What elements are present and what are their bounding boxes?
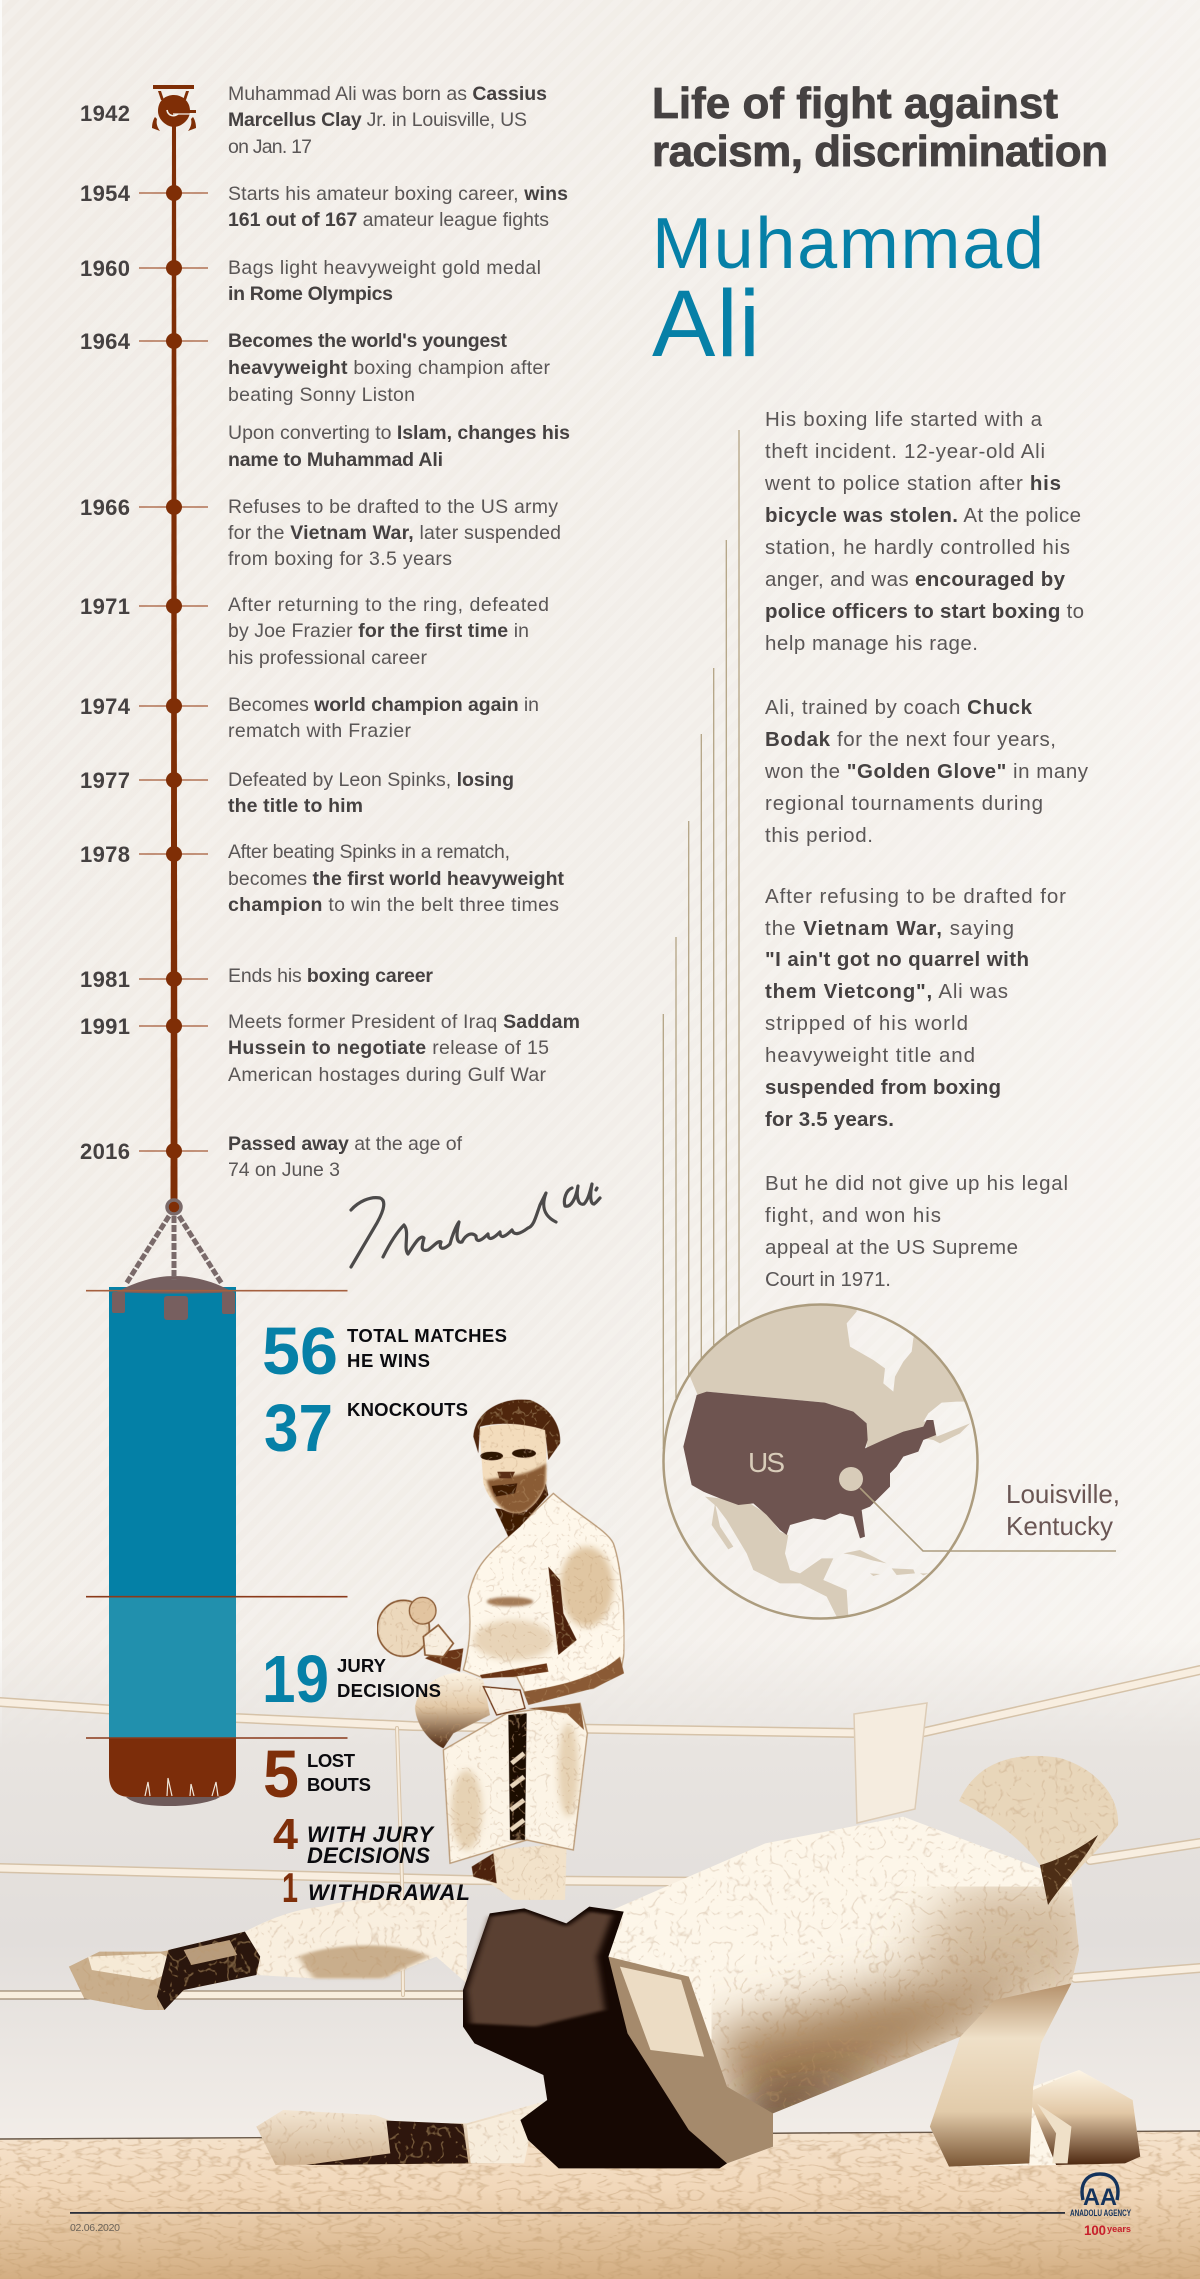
- footer rule and date: 02.06.2020: [70, 2222, 120, 2234]
- timeline events text: Upon converting to Islam, changes his: [228, 422, 570, 444]
- opponent floor leg: [256, 2102, 543, 2165]
- biography text: theft incident. 12-year-old Ali: [765, 440, 1045, 463]
- biography guide lines: [663, 430, 739, 1449]
- timeline events text: Hussein to negotiate release of 15: [228, 1037, 549, 1059]
- biography text: station, he hardly controlled his: [765, 536, 1070, 559]
- stat: 1 withdrawal: [282, 1864, 470, 1911]
- stat: 5 lost bouts: 5: [263, 1737, 299, 1812]
- ring backdrop wall: [0, 1640, 1200, 2140]
- stat: 4 with jury decisions: [273, 1810, 435, 1868]
- title: Muhammad Ali: Muhammad: [652, 204, 1044, 284]
- timeline events text: [228, 83, 580, 1181]
- heading: Life of fight against: [652, 79, 1058, 128]
- timeline years: 1977: [80, 768, 130, 793]
- land: Canada: [690, 1306, 970, 1448]
- timeline events text: on Jan. 17: [228, 136, 312, 158]
- timeline events text: Marcellus Clay Jr. in Louisville, US: [228, 109, 527, 131]
- timeline events text: Ends his boxing career: [228, 965, 433, 987]
- biography text: this period.: [765, 824, 873, 847]
- timeline years: 1981: [80, 967, 130, 992]
- opponent raised boot: [69, 1947, 191, 2010]
- timeline events text: Bags light heavyweight gold medal: [228, 257, 541, 279]
- timeline events text: his professional career: [228, 647, 428, 669]
- timeline events text: Refuses to be drafted to the US army: [228, 496, 558, 518]
- stat: 56 total wins: 56: [262, 1314, 338, 1389]
- stat: 4 with jury decisions: WITH JURY: [307, 1822, 435, 1847]
- floor edge: [0, 2131, 1200, 2139]
- biography text: stripped of his world: [765, 1012, 968, 1035]
- icon: speed bag: [152, 85, 196, 131]
- stat: 4 with jury decisions: DECISIONS: [307, 1843, 430, 1868]
- timeline nodes: [166, 185, 182, 1159]
- biography text: suspended from boxing: [765, 1076, 1001, 1099]
- biography text: fight, and won his: [765, 1204, 941, 1227]
- biography text: bicycle was stolen. At the police: [765, 504, 1081, 527]
- biography text: heavyweight title and: [765, 1044, 975, 1067]
- timeline events text: from boxing for 3.5 years: [228, 548, 452, 570]
- biography text: Court in 1971.: [765, 1268, 891, 1291]
- biography text: the Vietnam War, saying: [765, 917, 1014, 940]
- timeline events text: 74 on June 3: [228, 1159, 340, 1181]
- biography text: won the "Golden Glove" in many: [764, 760, 1089, 783]
- timeline events text: in Rome Olympics: [228, 283, 393, 305]
- timeline years: 2016: [80, 1139, 130, 1164]
- stat: 19 jury decisions: JURY: [337, 1655, 387, 1676]
- timeline events text: Defeated by Leon Spinks, losing: [228, 769, 514, 791]
- bag section: jury decisions: [109, 1597, 236, 1738]
- timeline years: 1964: [80, 329, 131, 354]
- timeline ticks: [139, 193, 208, 1151]
- photo: opponent on the canvas: [69, 1817, 1140, 2167]
- ring ropes and corner post: [0, 1670, 1200, 1995]
- logo: Anadolu Agency: [1070, 2174, 1131, 2238]
- bag top cap: [117, 1276, 233, 1294]
- biography text: After refusing to be drafted for: [765, 885, 1066, 908]
- timeline events text: After beating Spinks in a rematch,: [228, 841, 510, 863]
- stat: 37 knockouts: [264, 1391, 468, 1466]
- title: Muhammad Ali: [652, 204, 1044, 377]
- logo: Anadolu Agency: ANADOLU AGENCY: [1070, 2208, 1131, 2218]
- timeline events text: Becomes world champion again in: [228, 694, 539, 716]
- timeline years: 1954: [80, 181, 131, 206]
- opponent head: [959, 1756, 1118, 1905]
- stat: 37 knockouts: KNOCKOUTS: [347, 1399, 468, 1420]
- timeline events text: beating Sonny Liston: [228, 384, 415, 406]
- stat: 5 lost bouts: LOST: [307, 1750, 356, 1771]
- bag buckles: [112, 1292, 235, 1320]
- US label: US: [748, 1447, 785, 1478]
- globe outline: [664, 1304, 978, 1618]
- timeline years: 1971: [80, 594, 130, 619]
- stat: 4 with jury decisions: 4: [273, 1810, 299, 1859]
- opponent raised leg: [245, 1897, 467, 1983]
- timeline years: 1978: [80, 842, 130, 867]
- bag chains: [126, 1216, 222, 1284]
- timeline years: 1942: [80, 101, 130, 126]
- logo: Anadolu Agency: 100: [1084, 2222, 1106, 2238]
- stat: 19 jury decisions: DECISIONS: [337, 1680, 441, 1701]
- timeline events text: name to Muhammad Ali: [228, 449, 443, 471]
- callout: Louisville, Kentucky: Louisville,: [1006, 1479, 1120, 1509]
- biography text: went to police station after his: [764, 472, 1061, 495]
- photo: Ali standing: [377, 1399, 624, 1900]
- Louisville marker: [839, 1467, 863, 1491]
- timeline events text: Meets former President of Iraq Saddam: [228, 1011, 580, 1033]
- bag level lines: [86, 1291, 348, 1738]
- stat: 5 lost bouts: [263, 1737, 371, 1812]
- opponent body shading: [712, 1887, 1094, 2167]
- bag bottom cap: [126, 1797, 220, 1806]
- stat: 56 total wins: TOTAL MATCHES: [347, 1325, 507, 1346]
- timeline events text: heavyweight boxing champion after: [228, 357, 550, 379]
- biography text: But he did not give up his legal: [765, 1172, 1068, 1195]
- callout: Louisville, Kentucky: Kentucky: [1006, 1511, 1113, 1541]
- signature: [351, 1184, 600, 1267]
- biography text: "I ain't got no quarrel with: [765, 948, 1029, 971]
- heading: [652, 79, 1108, 176]
- stat: 5 lost bouts: BOUTS: [307, 1774, 371, 1795]
- biography text: Ali, trained by coach Chuck: [765, 696, 1033, 719]
- timeline events text: 161 out of 167 amateur league fights: [228, 209, 549, 231]
- heading: racism, discrimination: [652, 127, 1108, 176]
- timeline events text: champion to win the belt three times: [228, 894, 559, 916]
- biography text: His boxing life started with a: [765, 408, 1043, 431]
- timeline events text: American hostages during Gulf War: [228, 1064, 546, 1086]
- bag ring: [167, 1200, 181, 1214]
- callout: Louisville, Kentucky: [860, 1479, 1120, 1551]
- biography text: [764, 408, 1089, 1291]
- ring floor: [0, 2131, 1200, 2279]
- biography text: help manage his rage.: [765, 632, 978, 655]
- stat: 37 knockouts: 37: [264, 1391, 333, 1466]
- timeline events text: Muhammad Ali was born as Cassius: [228, 83, 547, 105]
- timeline events text: rematch with Frazier: [228, 720, 412, 742]
- biography text: them Vietcong", Ali was: [765, 980, 1008, 1003]
- timeline events text: Passed away at the age of: [228, 1133, 463, 1155]
- stat: 19 jury decisions: [262, 1642, 441, 1717]
- land: Mexico and Central America: [705, 1497, 928, 1617]
- left edge strip: [0, 0, 2, 2279]
- biography text: police officers to start boxing to: [765, 600, 1084, 623]
- stat: 1 withdrawal: WITHDRAWAL: [308, 1880, 470, 1905]
- heavy bag: [109, 1200, 236, 1806]
- timeline years: 1960: [80, 256, 130, 281]
- stat: 19 jury decisions: 19: [262, 1642, 329, 1717]
- timeline axis: [139, 120, 208, 1200]
- timeline years: 1966: [80, 495, 130, 520]
- timeline years: [80, 101, 131, 1164]
- stat: 1 withdrawal: 1: [282, 1864, 298, 1911]
- map: US in globe: [664, 1297, 1007, 1618]
- biography text: regional tournaments during: [765, 792, 1043, 815]
- opponent body: [608, 1817, 1140, 2167]
- biography text: Bodak for the next four years,: [765, 728, 1056, 751]
- logo: Anadolu Agency: years: [1107, 2224, 1131, 2234]
- stat: 56 total wins: HE WINS: [347, 1350, 430, 1371]
- stat: 56 total wins: [262, 1314, 507, 1389]
- biography text: anger, and was encouraged by: [765, 568, 1066, 591]
- timeline years: 1991: [80, 1014, 130, 1039]
- logo: Anadolu Agency: AA: [1083, 2184, 1117, 2211]
- biography text: appeal at the US Supreme: [765, 1236, 1018, 1259]
- bag section: wins by knockouts: [109, 1287, 236, 1597]
- timeline years: 1974: [80, 694, 131, 719]
- timeline events text: becomes the first world heavyweight: [228, 868, 564, 890]
- timeline events text: After returning to the ring, defeated: [228, 594, 549, 616]
- bag section: lost bouts: [109, 1738, 236, 1797]
- timeline events text: Becomes the world's youngest: [228, 330, 508, 352]
- opponent shorts and glove: [463, 1907, 1140, 2168]
- timeline events text: the title to him: [228, 795, 363, 817]
- title: Muhammad Ali: Ali: [652, 271, 760, 377]
- biography text: for 3.5 years.: [765, 1108, 894, 1131]
- United States: [683, 1392, 936, 1538]
- timeline events text: for the Vietnam War, later suspended: [228, 522, 561, 544]
- timeline events text: by Joe Frazier for the first time in: [228, 620, 529, 642]
- timeline events text: Starts his amateur boxing career, wins: [228, 183, 568, 205]
